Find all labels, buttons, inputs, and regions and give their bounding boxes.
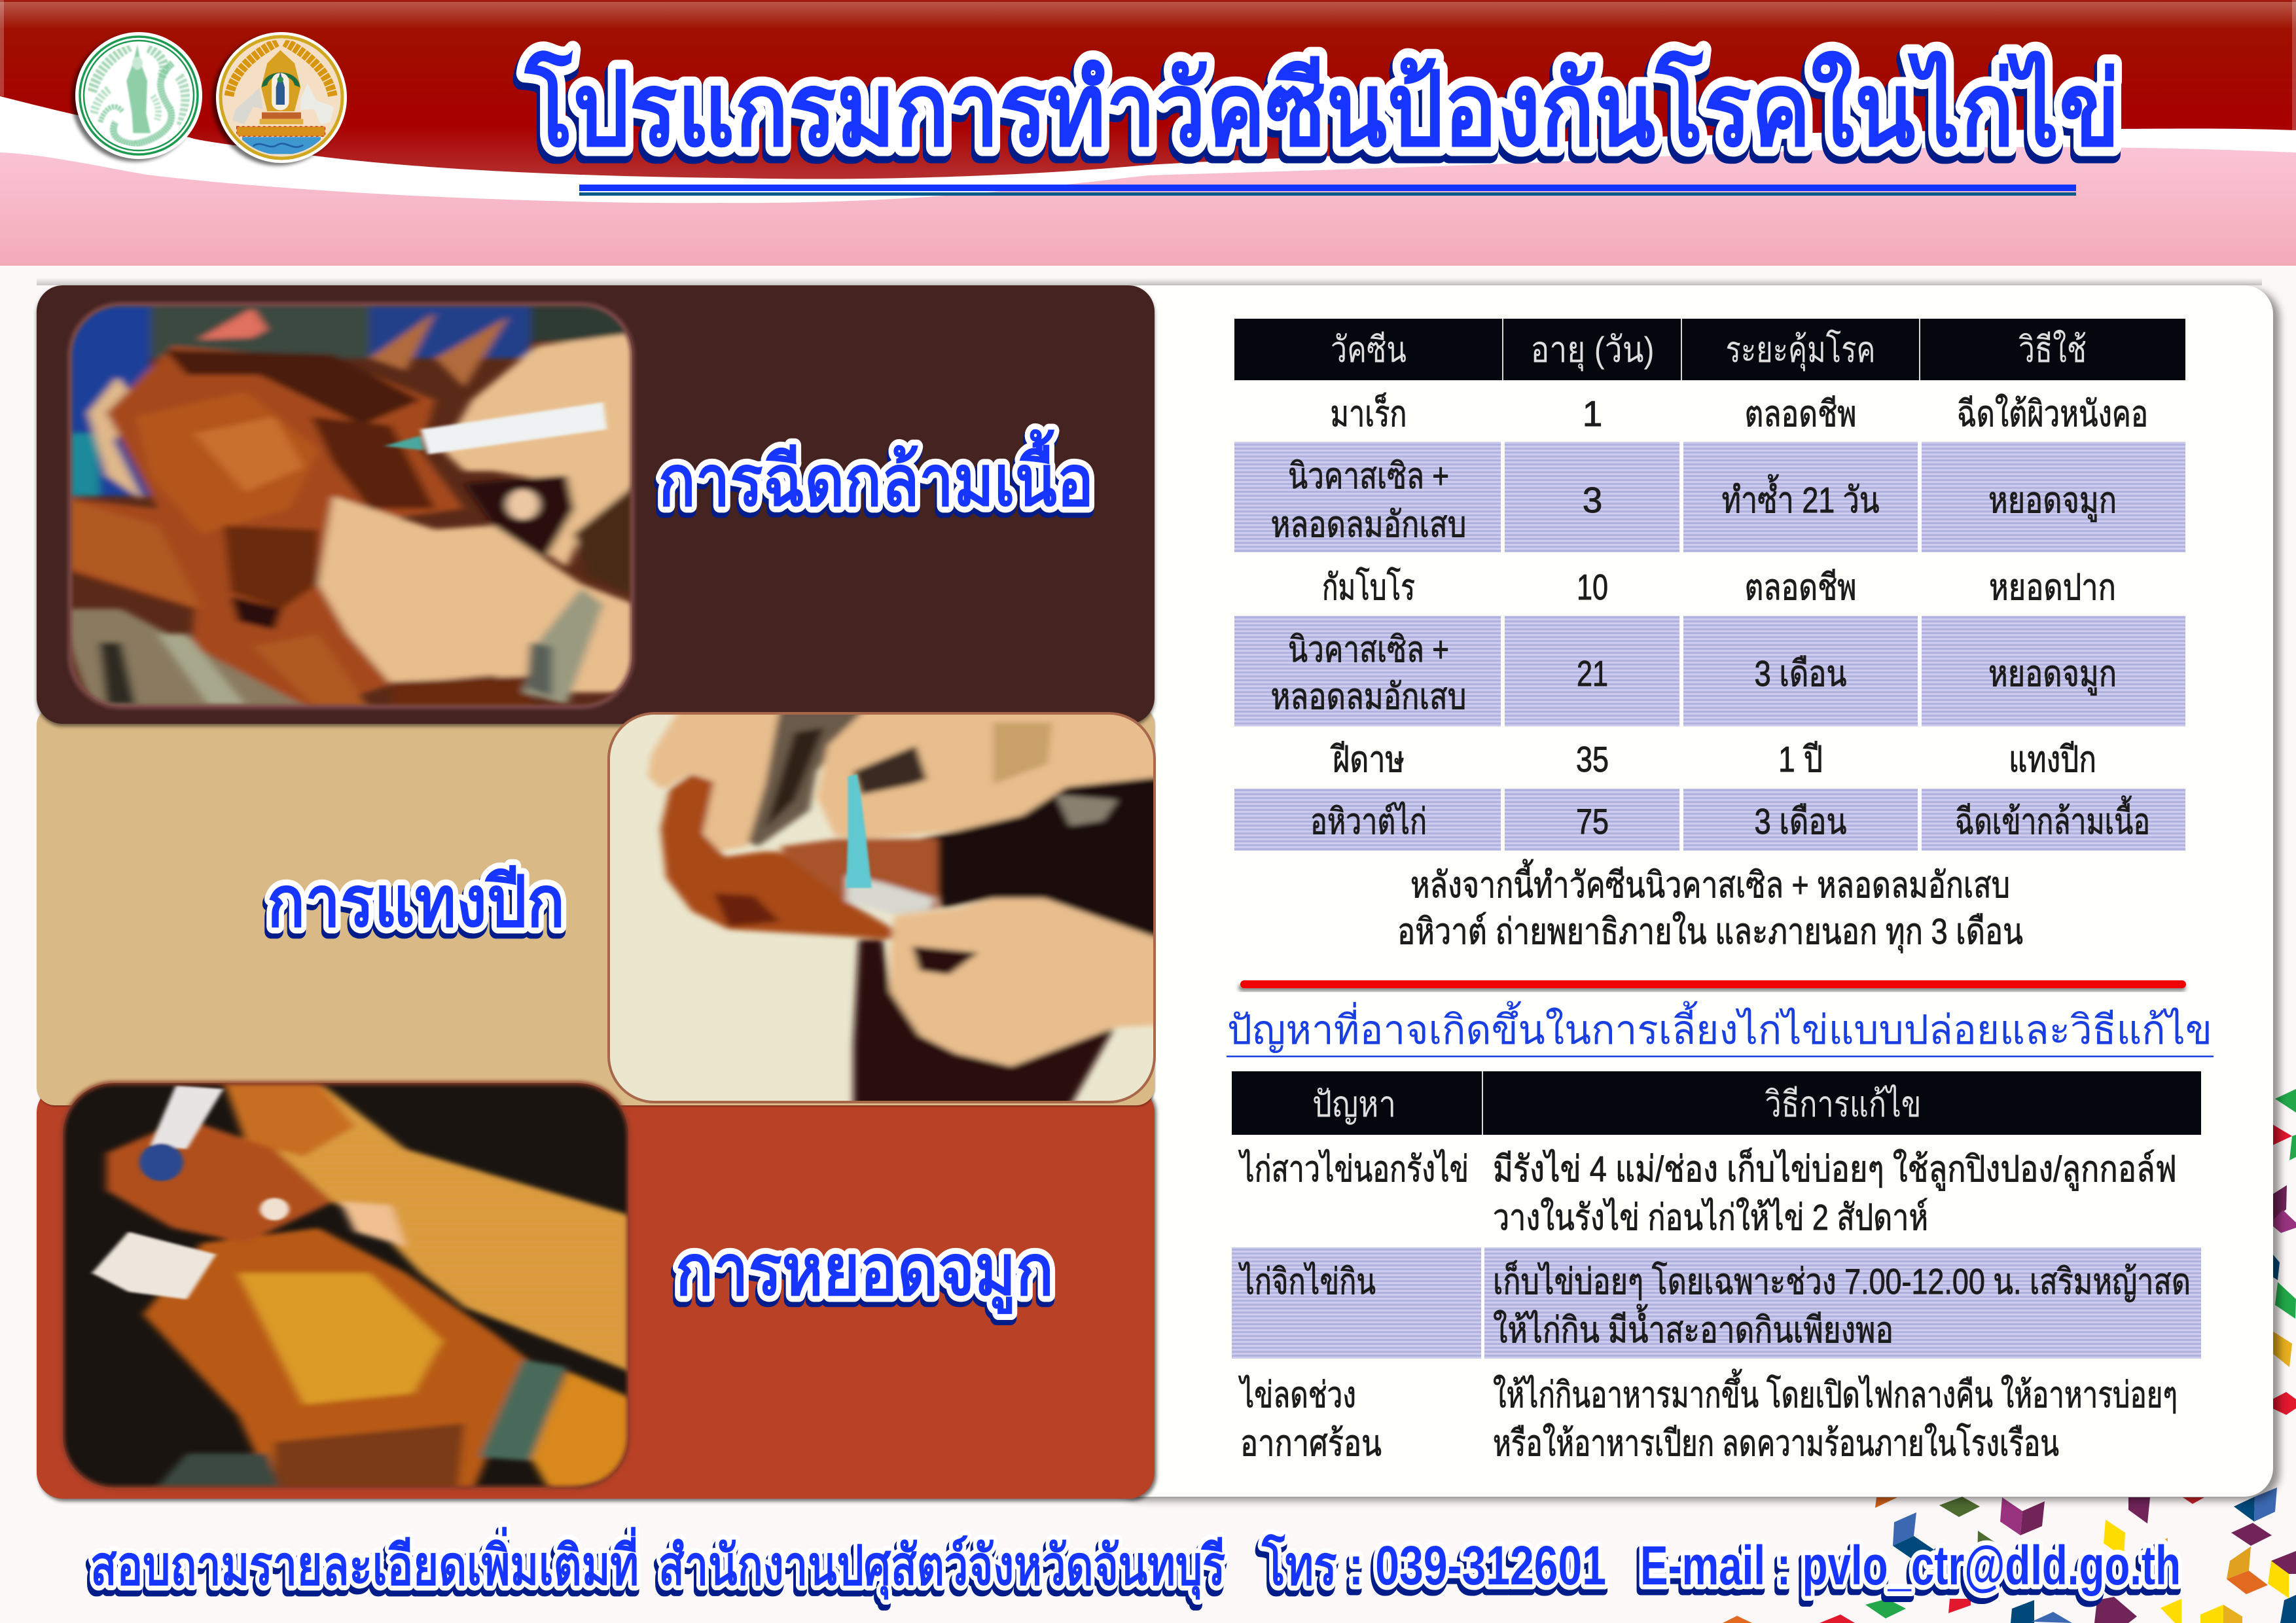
row: fowl pox: 35 xyxy=(1576,739,1609,779)
row: ND + IB day 21: 21 xyxy=(1577,653,1608,694)
row: fowl pox: ฝีดาษ xyxy=(1330,739,1405,779)
table header: วิธีการแก้ไข xyxy=(1765,1084,1922,1124)
row: ND + IB day 21: หลอดลมอักเสบ xyxy=(1271,676,1466,717)
label: nose drop: การหยอดจมูก xyxy=(675,1230,1054,1314)
table note: หลังจากนี้ทำวัคซีนนิวคาสเซิล + หลอดลมอักเสบ xyxy=(1410,859,2010,905)
row: drop in hot weather: อากาศร้อน xyxy=(1240,1423,1382,1463)
row: fowl pox: 1 ปี xyxy=(1778,739,1823,779)
row: egg pecking xyxy=(1232,1247,2201,1359)
row: Marek xyxy=(1330,393,2148,434)
table header: ปัญหา xyxy=(1312,1084,1396,1125)
photo frame xyxy=(70,304,632,707)
title underline xyxy=(579,185,2076,196)
row: ND + IB day 3: 3 xyxy=(1583,480,1602,520)
row: Marek: ตลอดชีพ xyxy=(1745,393,1856,434)
footer contact line: สำนักงานปศุสัตว์จังหวัดจันทบุรี xyxy=(658,1535,1225,1600)
header banner xyxy=(0,0,2296,266)
row: fowl cholera: 3 เดือน xyxy=(1754,801,1847,842)
row: ND + IB day 21: หยอดจมูก xyxy=(1988,653,2117,696)
panel: red nose-drop background xyxy=(37,1086,1157,1501)
row: Marek: 1 xyxy=(1583,393,1602,434)
panel: information card xyxy=(1113,285,2280,1501)
row: pullets laying outside: มีรังไข่ 4 แม่/ช่อง เก็บไข่บ่อยๆ ใช้ลูกปิงปอง/ลูกกอล์ฟ xyxy=(1493,1148,2177,1191)
photo: nose drop xyxy=(56,1078,647,1495)
footer contact line xyxy=(90,1527,2181,1600)
row: Marek: มาเร็ก xyxy=(1330,393,1407,434)
row: ND + IB day 21: 3 เดือน xyxy=(1754,653,1847,694)
row: Marek: ฉีดใต้ผิวหนังคอ xyxy=(1957,393,2148,434)
label: wing web: การแทงปีก xyxy=(267,862,565,941)
row: fowl cholera: ฉีดเข้ากล้ามเนื้อ xyxy=(1955,796,2150,842)
row: Gumboro: หยอดปาก xyxy=(1989,567,2116,607)
row: egg pecking: ให้ไก่กิน มีน้ำสะอาดกินเพียงพอ xyxy=(1493,1304,1893,1350)
row: Gumboro: ตลอดชีพ xyxy=(1745,567,1856,607)
row: Gumboro: 10 xyxy=(1577,567,1608,607)
row: pullets laying outside: ไก่สาวไข่นอกรังไข่ xyxy=(1238,1149,1469,1189)
panel: tan wing-stab section xyxy=(37,707,1155,1107)
table header xyxy=(1232,1071,2201,1135)
panel top shadow xyxy=(37,277,2262,285)
photo frame xyxy=(63,1083,628,1488)
table header xyxy=(1234,319,2185,380)
row: fowl pox: แทงปีก xyxy=(2009,739,2096,779)
footer contact line: สอบถามรายละเอียดเพิ่มเติมที่ xyxy=(90,1527,639,1596)
row: pullets laying outside: วางในรังไข่ ก่อนไก่ให้ไข่ 2 สัปดาห์ xyxy=(1493,1197,1928,1238)
row: ND + IB day 3: ทำซ้ำ 21 วัน xyxy=(1721,474,1880,520)
row: fowl cholera: อหิวาต์ไก่ xyxy=(1310,801,1427,842)
row: egg pecking: ไก่จิกไข่กิน xyxy=(1238,1261,1376,1302)
panel: brown muscle injection section xyxy=(26,285,1155,726)
table header: ระยะคุ้มโรค xyxy=(1725,329,1876,372)
row: pullets laying outside xyxy=(1238,1148,2177,1238)
row: ND + IB day 3: หลอดลมอักเสบ xyxy=(1271,504,1466,544)
table note xyxy=(1397,859,2023,954)
decorative colored cubes xyxy=(1723,1089,2296,1623)
logo: provincial emblem xyxy=(212,32,347,166)
photo frame xyxy=(609,713,1155,1102)
row: fowl cholera: 75 xyxy=(1576,801,1609,842)
footer contact line: โทร : 039-312601 xyxy=(1261,1534,1606,1596)
row: drop in hot weather: ไข่ลดช่วง xyxy=(1238,1374,1356,1415)
row: Gumboro: กัมโบโร xyxy=(1322,567,1415,607)
table header: วิธีใช้ xyxy=(2018,329,2087,370)
row: ND + IB day 3: หยอดจมูก xyxy=(1988,480,2117,522)
row: ND + IB day 21: นิวคาสเซิล + xyxy=(1288,629,1449,669)
table: vaccination schedule xyxy=(1234,319,2185,957)
row: Gumboro xyxy=(1322,567,2116,607)
logo: green naga seal xyxy=(71,32,202,162)
row: fowl pox xyxy=(1330,739,2096,779)
row: ND + IB day 3 xyxy=(1234,442,2185,552)
table: problems and solutions xyxy=(1232,1071,2201,1467)
row: fowl cholera xyxy=(1234,789,2185,851)
table header: อายุ (วัน) xyxy=(1530,329,1655,372)
table note: อหิวาต์ ถ่ายพยาธิภายใน และภายนอก ทุก 3 เดือน xyxy=(1397,911,2023,954)
photo: wing web vaccination xyxy=(610,715,1153,1101)
section: nose drop photo and label xyxy=(56,1078,1054,1495)
row: drop in hot weather: หรือให้อาหารเปียก ลดความร้อนภายในโรงเรือน xyxy=(1493,1423,2059,1463)
table header: วัคซีน xyxy=(1331,329,1407,370)
red divider line xyxy=(1238,980,2186,991)
label: muscle injection: การฉีดกล้ามเนื้อ xyxy=(658,429,1094,520)
row: ND + IB day 21 xyxy=(1234,616,2185,726)
section heading: ปัญหาที่อาจเกิดขึ้นในการเลี้ยงไก่ไข่แบบปล่อยและวิธีแก้ไข xyxy=(1227,1001,2212,1053)
row: ND + IB day 3: นิวคาสเซิล + xyxy=(1288,455,1449,496)
photo: muscle injection xyxy=(70,304,632,707)
row: drop in hot weather xyxy=(1238,1369,2178,1463)
